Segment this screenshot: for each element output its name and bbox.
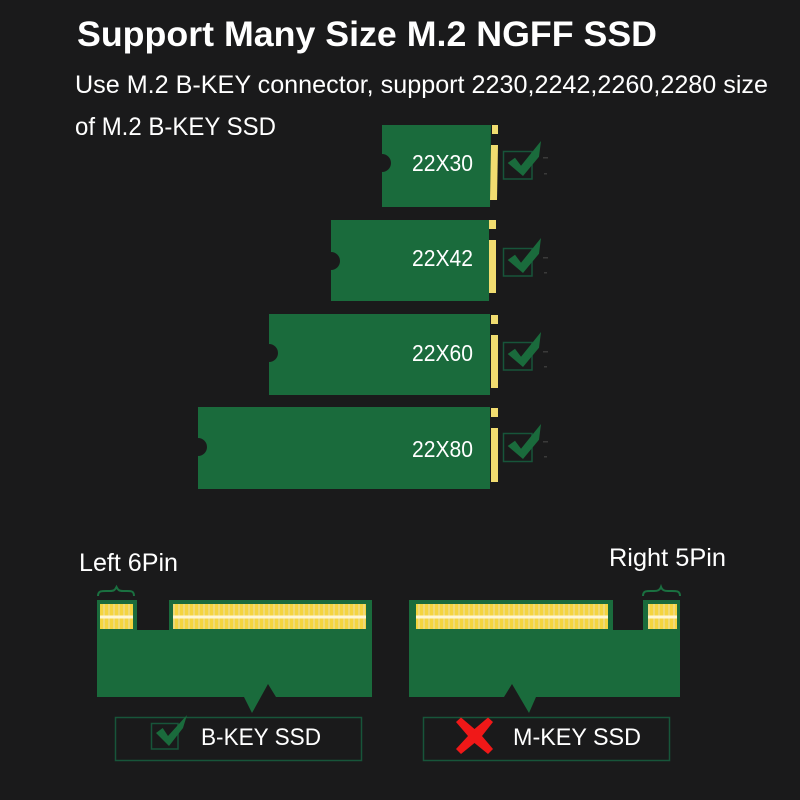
SSD card 22X30: 22X30 [412,150,473,176]
gold pins: right 5 pin [648,604,677,629]
SSD card 22X42: 22X42 [412,245,473,271]
subtitle text: Use M.2 B-KEY connector, support 2230,2242,2260,2280 size [75,71,768,99]
label: Left 6Pin: Left 6Pin [79,549,178,577]
B-KEY label box: B-KEY SSD [201,724,321,751]
icon: check mark [152,715,187,749]
M-KEY label box [424,718,670,760]
SSD card 22X80: 22X80 [412,436,473,462]
M-KEY connector board [409,600,680,713]
SSD card 22X80 [198,407,548,489]
SSD card 22X60: 22X60 [412,340,473,366]
gold pins: main row [416,604,608,629]
SSD card 22X42 [331,220,548,301]
bracket: right pins [643,587,680,596]
B-KEY connector board [97,600,372,713]
bracket: left pins [98,587,134,596]
subtitle text [75,71,768,141]
subtitle text: of M.2 B-KEY SSD [75,113,276,141]
icon: red cross [456,718,493,754]
label: Right 5Pin: Right 5Pin [609,544,726,572]
SSD card 22X60 [269,314,548,395]
gold pins: left 6 pin [100,604,133,629]
M-KEY label box: M-KEY SSD [513,724,641,751]
title: Support Many Size M.2 NGFF SSD [77,15,657,54]
gold pins: main row [173,604,366,629]
SSD card 22X30 [382,125,548,207]
B-KEY label box [116,715,362,760]
